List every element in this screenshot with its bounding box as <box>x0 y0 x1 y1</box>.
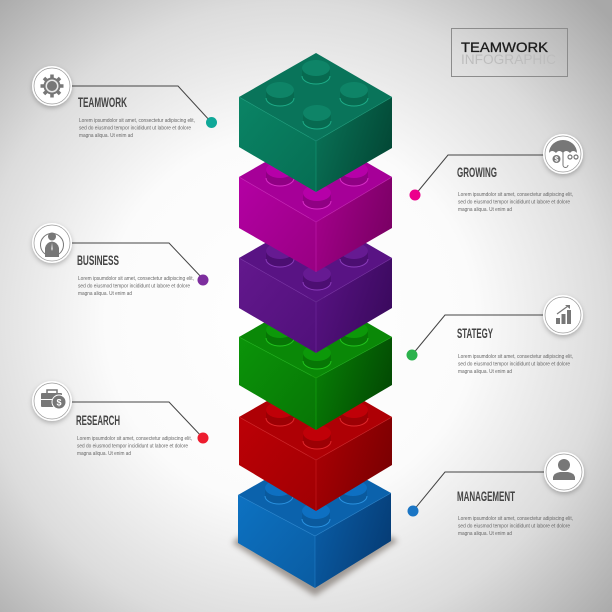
icon: umbrella with coins: $ <box>555 156 559 164</box>
callout: growing <box>410 134 583 213</box>
brick: teal <box>239 53 392 192</box>
brick: purple <box>239 214 392 353</box>
callout: teamwork <box>32 66 217 139</box>
icon: briefcase with coin: $ <box>56 398 62 408</box>
callout: teamwork: TEAMWORK <box>78 94 127 110</box>
brick: green <box>239 293 392 430</box>
brick: magenta <box>239 133 392 272</box>
title box <box>452 28 568 76</box>
callout: research <box>32 381 208 457</box>
brick stack <box>232 53 398 596</box>
callout: teamwork: sed do eiusmod tempor incididunt ut labore et dolore <box>79 126 191 132</box>
callout: growing: GROWING <box>457 164 497 180</box>
callout: teamwork: magna aliqua. Ut enim ad <box>79 133 133 139</box>
callout: business: sed do eiusmod tempor incididunt ut labore et dolore <box>78 284 190 290</box>
callout: business: Lorem ipsumdolor sit amet, consectetur adipiscing elit, <box>78 276 194 282</box>
callout: growing: magna aliqua. Ut enim ad <box>458 207 512 213</box>
callout: management: magna aliqua. Ut enim ad <box>458 531 512 537</box>
brick: blue <box>238 451 391 588</box>
icon: umbrella with coins <box>549 140 578 168</box>
icon: gear <box>40 74 64 98</box>
callout: teamwork: Lorem ipsumdolor sit amet, consectetur adipiscing elit, <box>79 118 195 124</box>
callout: growing: Lorem ipsumdolor sit amet, consectetur adipiscing elit, <box>458 192 573 198</box>
callout: business: BUSINESS <box>77 252 119 268</box>
callout: business <box>32 223 208 297</box>
icon: briefcase with coin <box>41 390 66 409</box>
title box: INFOGRAPHIC <box>461 51 556 67</box>
callout: business: magna aliqua. Ut enim ad <box>78 291 132 297</box>
icon: rising bar chart <box>556 305 571 324</box>
callout: strategy: sed do eiusmod tempor incididunt ut labore et dolore <box>458 362 570 368</box>
callout: management: MANAGEMENT <box>457 488 515 504</box>
title box: TEAMWORK <box>461 39 549 55</box>
icon: businessman in light bulb <box>40 232 63 257</box>
callout: research: Lorem ipsumdolor sit amet, consectetur adipiscing elit, <box>77 436 192 442</box>
callout: strategy: STATEGY <box>457 325 493 341</box>
brick: red <box>239 373 392 511</box>
callout: research: magna aliqua. Ut enim ad <box>77 451 131 457</box>
callout: strategy <box>406 295 583 375</box>
callout: strategy: Lorem ipsumdolor sit amet, consectetur adipiscing elit, <box>458 354 573 360</box>
callout: research: sed do eiusmod tempor incididunt ut labore et dolore <box>77 444 188 450</box>
callout: management: Lorem ipsumdolor sit amet, consectetur adipiscing elit, <box>458 516 573 522</box>
base shadow <box>232 536 398 596</box>
callout: research: RESEARCH <box>76 412 120 428</box>
callout: strategy: magna aliqua. Ut enim ad <box>458 369 512 375</box>
callout: management: sed do eiusmod tempor incididunt ut labore et dolore <box>458 524 570 530</box>
callout: growing: sed do eiusmod tempor incididunt ut labore et dolore <box>458 200 570 206</box>
icon: person <box>553 459 575 480</box>
callout: management <box>408 452 584 537</box>
